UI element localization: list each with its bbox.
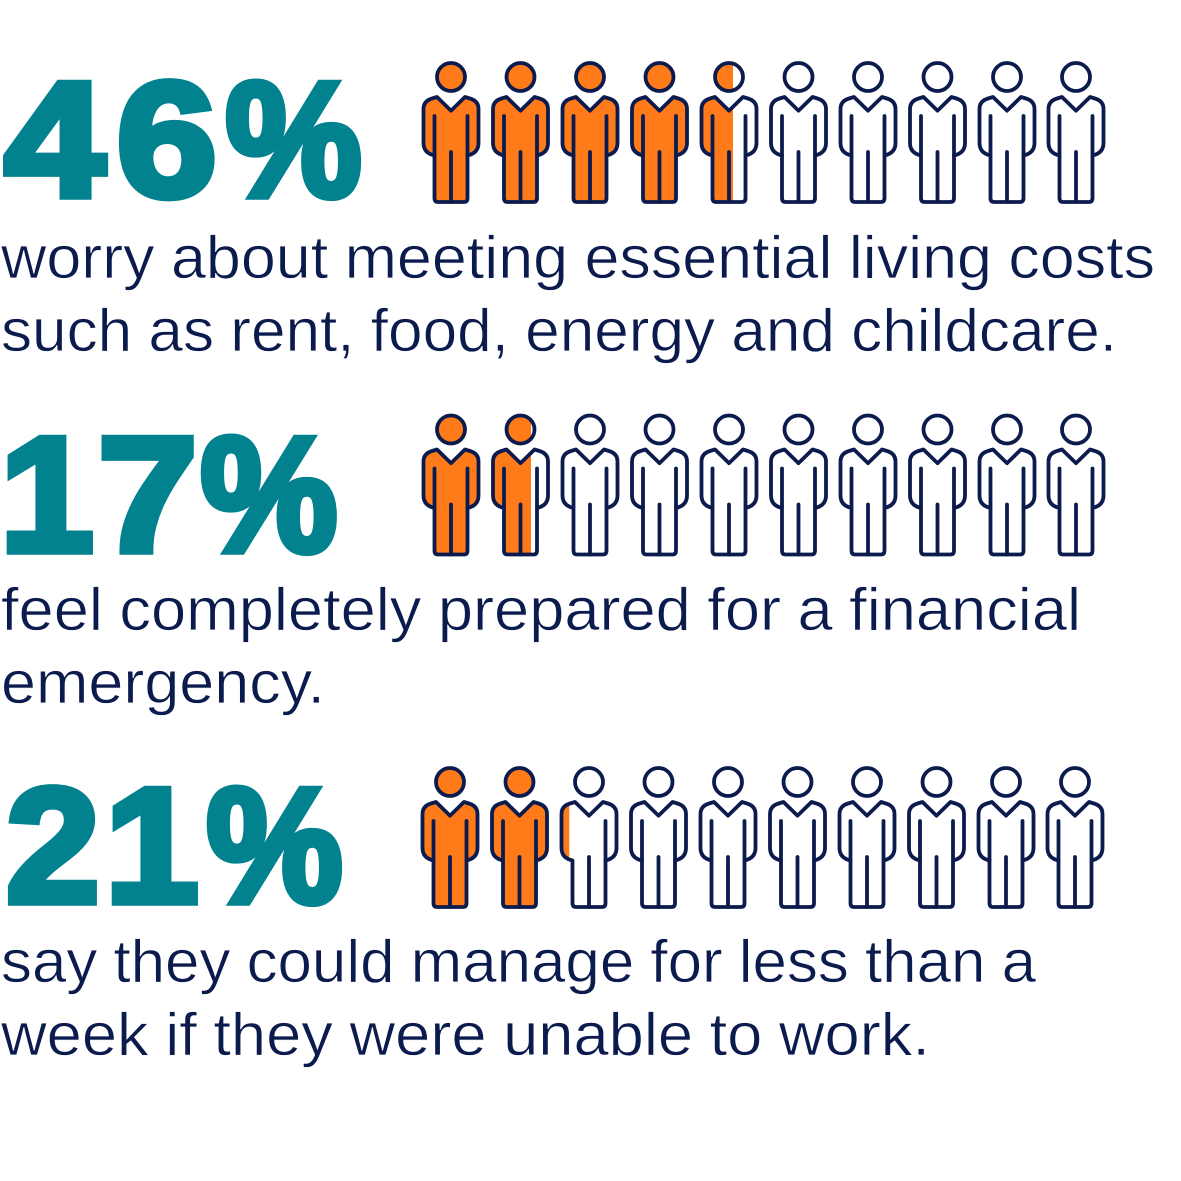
icon: person part filled xyxy=(562,768,616,907)
statistic: 17%: 1 xyxy=(0,404,94,586)
statistic: 46%: % xyxy=(226,48,362,231)
text: unable to work xyxy=(0,928,1037,1068)
icon: person empty xyxy=(770,768,825,907)
icon: person empty xyxy=(909,768,964,907)
statistic: 21%: % xyxy=(206,754,343,937)
statistic: 21%: 2 xyxy=(6,755,100,937)
text: living costs xyxy=(0,224,1155,364)
icon: person empty xyxy=(771,416,826,554)
icon: person empty xyxy=(632,416,687,554)
icon: person part filled xyxy=(493,416,548,554)
icon: person empty xyxy=(910,63,965,202)
icon: person filled xyxy=(562,63,618,202)
statistic: 17% xyxy=(0,403,337,586)
icon: person filled xyxy=(422,768,478,907)
text: living costs: such as rent, food, energy and childcare. xyxy=(1,297,1117,364)
statistic: 46% xyxy=(4,48,362,231)
section: 21 percent xyxy=(0,754,1102,1068)
icon: person empty xyxy=(702,416,756,554)
icon: person empty xyxy=(771,63,826,202)
icon: person filled xyxy=(492,768,547,907)
section: 46 percent xyxy=(0,48,1155,364)
icon: person empty xyxy=(980,63,1034,202)
icon: person empty xyxy=(1048,63,1104,202)
text: unable to work: say they could manage for less than a xyxy=(1,928,1037,995)
statistic: 46%: 6 xyxy=(116,49,217,231)
statistic: 21% xyxy=(6,754,343,937)
icon: person filled xyxy=(424,416,478,554)
icon: person empty xyxy=(910,416,965,554)
icon: person empty xyxy=(1048,416,1104,554)
icon: person empty xyxy=(562,416,618,554)
section: 17 percent xyxy=(0,403,1104,716)
icon: person empty xyxy=(1048,768,1102,907)
icon: person part filled xyxy=(702,63,756,202)
icon: person empty xyxy=(631,768,686,907)
text: financial emergency: emergency. xyxy=(1,649,325,716)
text: financial emergency: feel completely prepared for a financial xyxy=(1,576,1081,643)
text: financial emergency xyxy=(1,576,1081,716)
statistic: 21%: 1 xyxy=(105,755,199,937)
icon: person empty xyxy=(978,768,1034,907)
text: living costs: worry about meeting essential living costs xyxy=(0,224,1155,291)
pictogram: 21 of 100 people xyxy=(422,768,1102,907)
pictogram: 17 of 100 people xyxy=(424,416,1104,554)
icon: person filled xyxy=(632,63,687,202)
icon: person empty xyxy=(700,768,756,907)
icon: person filled xyxy=(493,63,548,202)
icon: person filled xyxy=(424,63,478,202)
pictogram: 46 of 100 people xyxy=(424,63,1104,202)
icon: person empty xyxy=(980,416,1034,554)
text: unable to work: week if they were unable to work. xyxy=(0,1001,930,1068)
icon: person empty xyxy=(840,768,894,907)
icon: person empty xyxy=(840,416,896,554)
statistic: 17%: 7 xyxy=(98,404,197,586)
statistic: 17%: % xyxy=(200,403,337,586)
icon: person empty xyxy=(840,63,896,202)
statistic: 46%: 4 xyxy=(4,49,105,231)
